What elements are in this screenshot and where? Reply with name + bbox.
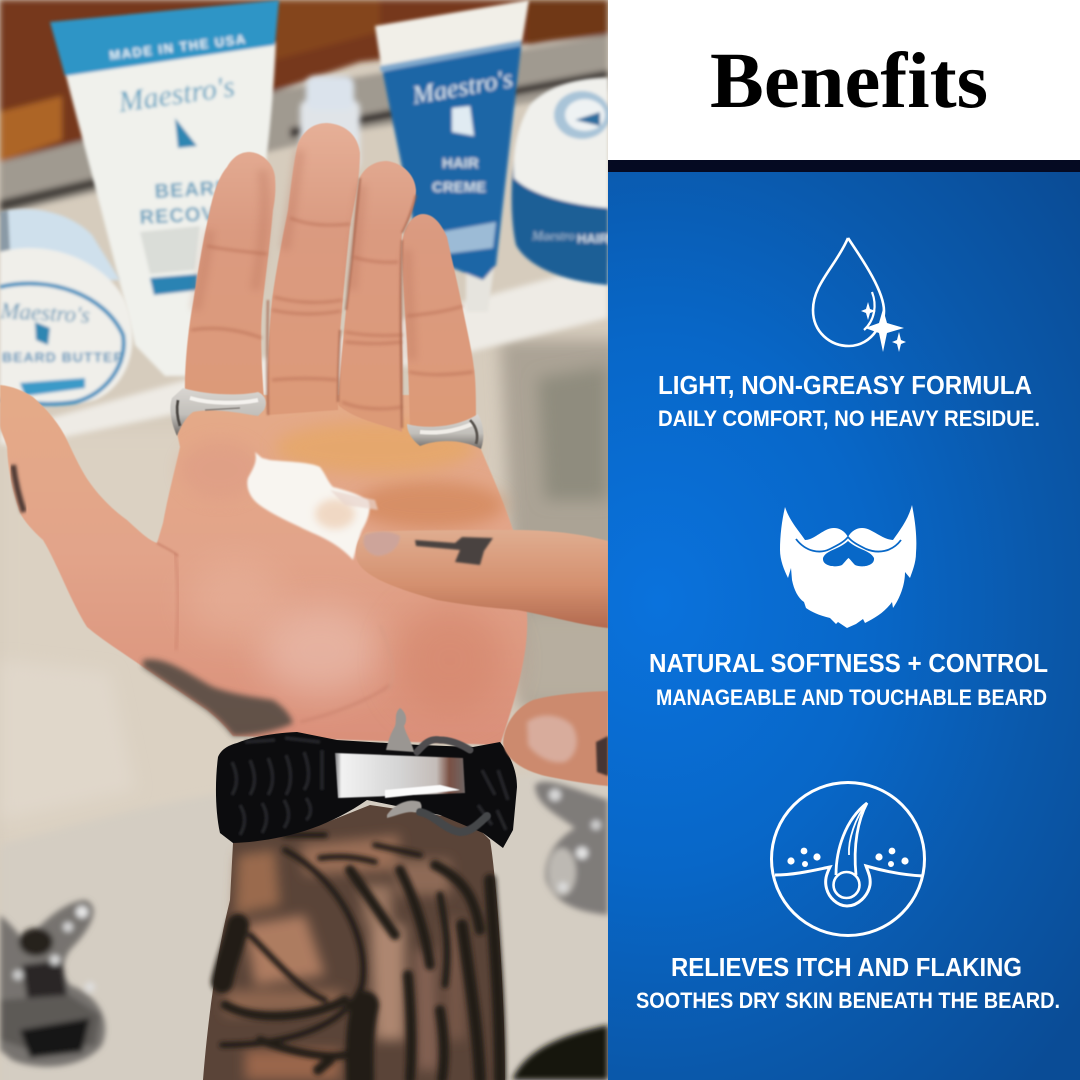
product: hair creme tube xyxy=(375,0,529,312)
header: white title area xyxy=(608,0,1080,160)
finger shading and creases xyxy=(191,150,473,428)
benefit 3 heading: RELIEVES ITCH AND FLAKING xyxy=(671,952,1022,982)
palm highlights and shading xyxy=(157,422,505,722)
benefit 1 description: DAILY COMFORT, NO HEAVY RESIDUE. xyxy=(658,406,1040,431)
panel: benefits xyxy=(608,172,1080,1080)
finger: middle xyxy=(268,123,360,415)
forearm with tattoos xyxy=(203,805,505,1080)
bracelet xyxy=(216,732,517,848)
finger: pinky xyxy=(402,214,476,430)
product: hair creme tube: CREME xyxy=(432,179,486,196)
icon: beard xyxy=(780,505,916,628)
shelf surface xyxy=(0,262,608,445)
product: right jar: HAIR xyxy=(577,231,608,246)
right thumb xyxy=(503,691,608,786)
ring on pinky finger xyxy=(407,414,483,449)
product: beard butter jar xyxy=(0,209,133,406)
benefit 2 heading: NATURAL SOFTNESS + CONTROL xyxy=(649,648,1048,678)
background: bathroom wall and sink xyxy=(0,0,620,1080)
product: beard recovery tube: RECOVERY xyxy=(139,201,260,229)
palm and thumb xyxy=(0,385,527,745)
product: beard recovery tube: BEARD xyxy=(154,177,231,203)
ring on index finger xyxy=(170,388,266,436)
wood shelf xyxy=(0,0,608,215)
product: beard recovery tube: MADE IN THE USA xyxy=(109,31,247,63)
product: beard recovery tube xyxy=(50,0,279,376)
divider bar xyxy=(608,160,1080,172)
small white bottle xyxy=(300,76,360,170)
benefit 1 heading: LIGHT, NON-GREASY FORMULA xyxy=(658,370,1032,400)
icon: hair follicle xyxy=(772,782,924,936)
pointing finger xyxy=(356,530,608,628)
product: right jar: Maestro xyxy=(531,228,575,243)
product: beard recovery tube: Maestro's xyxy=(115,70,237,119)
title: Benefits xyxy=(710,38,988,125)
product: beard butter jar: Maestro's xyxy=(0,298,91,328)
finger: ring xyxy=(338,161,416,432)
steel clasp xyxy=(335,708,487,832)
finger: index xyxy=(185,152,275,400)
icon: water drop with sparkles xyxy=(813,238,906,352)
left faucet xyxy=(0,900,105,1067)
right faucet xyxy=(535,782,608,915)
wrist tattoo xyxy=(143,659,293,736)
product: right jar xyxy=(512,78,610,285)
product: hair creme tube: HAIR xyxy=(442,155,479,172)
beard cream xyxy=(247,452,378,560)
product: hair creme tube: Maestro's xyxy=(409,64,515,110)
photo: hand with beard cream and products xyxy=(0,0,608,1080)
dark corner shadow xyxy=(512,1025,608,1080)
product: beard butter jar: BEARD BUTTER xyxy=(2,349,124,365)
thumb tattoo xyxy=(13,465,24,512)
